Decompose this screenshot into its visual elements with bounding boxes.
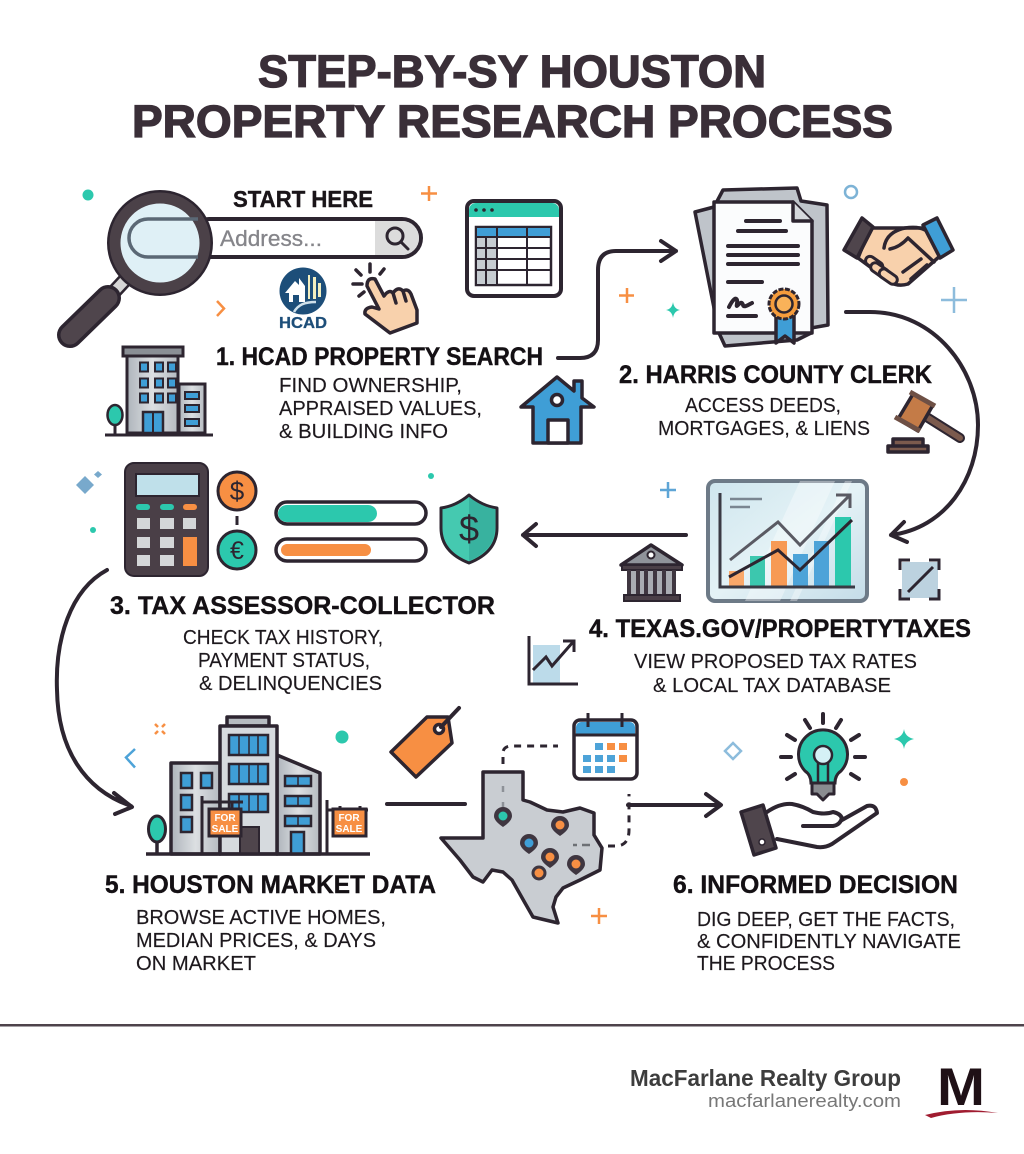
title: PROPERTY RESEARCH PROCESS bbox=[132, 96, 893, 147]
text: step 6 description bbox=[697, 909, 961, 975]
icon: office building bbox=[105, 347, 213, 435]
heading: step 3: 3. TAX ASSESSOR-COLLECTOR bbox=[110, 592, 495, 620]
footer bbox=[0, 1024, 1024, 1118]
icon: small line chart bbox=[529, 636, 578, 684]
panel: step 5 Houston market data bbox=[105, 717, 436, 975]
icon: dollar shield: $ bbox=[459, 508, 479, 549]
decorations: lower accents bbox=[126, 724, 914, 924]
icon: dollar and euro coins bbox=[218, 472, 256, 569]
icon: search bar: START HERE bbox=[233, 186, 373, 212]
icon: magnifying glass bbox=[70, 192, 211, 335]
text: step 3 description bbox=[183, 627, 383, 695]
icon: for sale buildings bbox=[146, 717, 370, 854]
text: step 5 description: MEDIAN PRICES, & DAYS bbox=[136, 930, 376, 952]
icon: search bar: Address... bbox=[220, 226, 322, 251]
text: step 2 description: ACCESS DEEDS, bbox=[685, 395, 841, 417]
arrow: step 4 to step 3 bbox=[523, 524, 686, 546]
icon: price tag bbox=[391, 708, 459, 777]
text: step 1 description bbox=[279, 375, 482, 443]
heading: step 5: 5. HOUSTON MARKET DATA bbox=[105, 871, 436, 899]
decorations: top row accents bbox=[76, 186, 967, 533]
text: step 3 description: PAYMENT STATUS, bbox=[198, 650, 370, 672]
icon: for sale buildings: SALE bbox=[336, 824, 363, 835]
panel: step 4 Texas.gov property taxes bbox=[529, 481, 971, 697]
title: STEP-BY-SY HOUSTON bbox=[258, 46, 766, 97]
text: step 4 description: & LOCAL TAX DATABASE bbox=[653, 675, 891, 697]
icon: deed documents bbox=[695, 188, 828, 346]
logo: MacFarlane M: M bbox=[937, 1058, 985, 1117]
heading: step 4: 4. TEXAS.GOV/PROPERTYTAXES bbox=[589, 615, 971, 643]
text: step 4 description: VIEW PROPOSED TAX RATES bbox=[634, 651, 917, 673]
text: step 6 description: DIG DEEP, GET THE FACTS, bbox=[697, 909, 955, 931]
chart: rising bar chart panel bbox=[708, 481, 867, 601]
text: step 6 description: THE PROCESS bbox=[697, 953, 835, 975]
icon: calendar bbox=[574, 713, 637, 779]
text: step 3 description: & DELINQUENCIES bbox=[199, 673, 382, 695]
text: step 6 description: & CONFIDENTLY NAVIGATE bbox=[697, 931, 961, 953]
icon: pointing hand bbox=[353, 264, 417, 333]
arrow: step 5 to map bbox=[387, 802, 465, 806]
text: step 2 description bbox=[658, 395, 870, 440]
icon: for sale buildings: FOR bbox=[338, 813, 360, 824]
panel: step 6 informed decision bbox=[673, 714, 961, 975]
icon: expand frame bbox=[900, 560, 939, 599]
arrow: step 2 to step 4 bbox=[846, 312, 978, 542]
icon: spreadsheet window bbox=[467, 201, 561, 296]
text: step 1 description: & BUILDING INFO bbox=[279, 421, 448, 443]
heading: step 6: 6. INFORMED DECISION bbox=[673, 871, 958, 899]
icon: bank building bbox=[621, 545, 682, 601]
arrow: step 1 to step 2 bbox=[558, 241, 676, 358]
heading: step 1: 1. HCAD PROPERTY SEARCH bbox=[216, 343, 543, 371]
text: company name and website: MacFarlane Realty Group bbox=[630, 1065, 901, 1091]
arrow: map to step 6 bbox=[628, 794, 721, 816]
icon: dollar and euro coins: $ bbox=[230, 476, 245, 506]
text: step 1 description: APPRAISED VALUES, bbox=[279, 398, 482, 420]
icon: search bar bbox=[190, 186, 421, 257]
panel: step 3 Tax Assessor-Collector bbox=[110, 463, 497, 695]
text: step 1 description: FIND OWNERSHIP, bbox=[279, 375, 462, 397]
icon: dollar and euro coins: € bbox=[230, 537, 244, 565]
icon: calculator bbox=[125, 463, 208, 576]
text: company name and website: macfarlanerealty.com bbox=[708, 1090, 901, 1111]
icon: house bbox=[521, 377, 594, 443]
icon: HCAD logo: HCAD bbox=[279, 315, 327, 332]
icon: dollar shield bbox=[441, 495, 497, 563]
text: step 5 description: BROWSE ACTIVE HOMES, bbox=[136, 907, 386, 929]
title bbox=[132, 46, 893, 147]
text: step 5 description bbox=[136, 907, 386, 975]
icon: for sale buildings: SALE bbox=[212, 824, 239, 835]
panel: step 1 HCAD property search bbox=[70, 186, 594, 443]
heading: step 2: 2. HARRIS COUNTY CLERK bbox=[619, 361, 932, 389]
text: step 5 description: ON MARKET bbox=[136, 953, 256, 975]
text: step 4 description bbox=[634, 651, 917, 697]
arrow: step 3 to step 5 bbox=[57, 570, 132, 814]
icon: HCAD logo bbox=[279, 268, 327, 332]
panel: step 2 Harris County Clerk bbox=[619, 188, 960, 452]
chart: progress bars bbox=[276, 502, 426, 561]
text: company name and website bbox=[630, 1065, 901, 1111]
icon: for sale buildings: FOR bbox=[214, 813, 236, 824]
map: Texas with pins bbox=[441, 746, 629, 923]
icon: handshake bbox=[844, 218, 953, 286]
icon: light bulb bbox=[781, 714, 865, 800]
text: step 3 description: CHECK TAX HISTORY, bbox=[183, 627, 383, 649]
logo: MacFarlane M bbox=[925, 1058, 998, 1118]
icon: open hand bbox=[741, 804, 877, 855]
icon: gavel bbox=[888, 392, 960, 452]
text: step 2 description: MORTGAGES, & LIENS bbox=[658, 418, 870, 440]
